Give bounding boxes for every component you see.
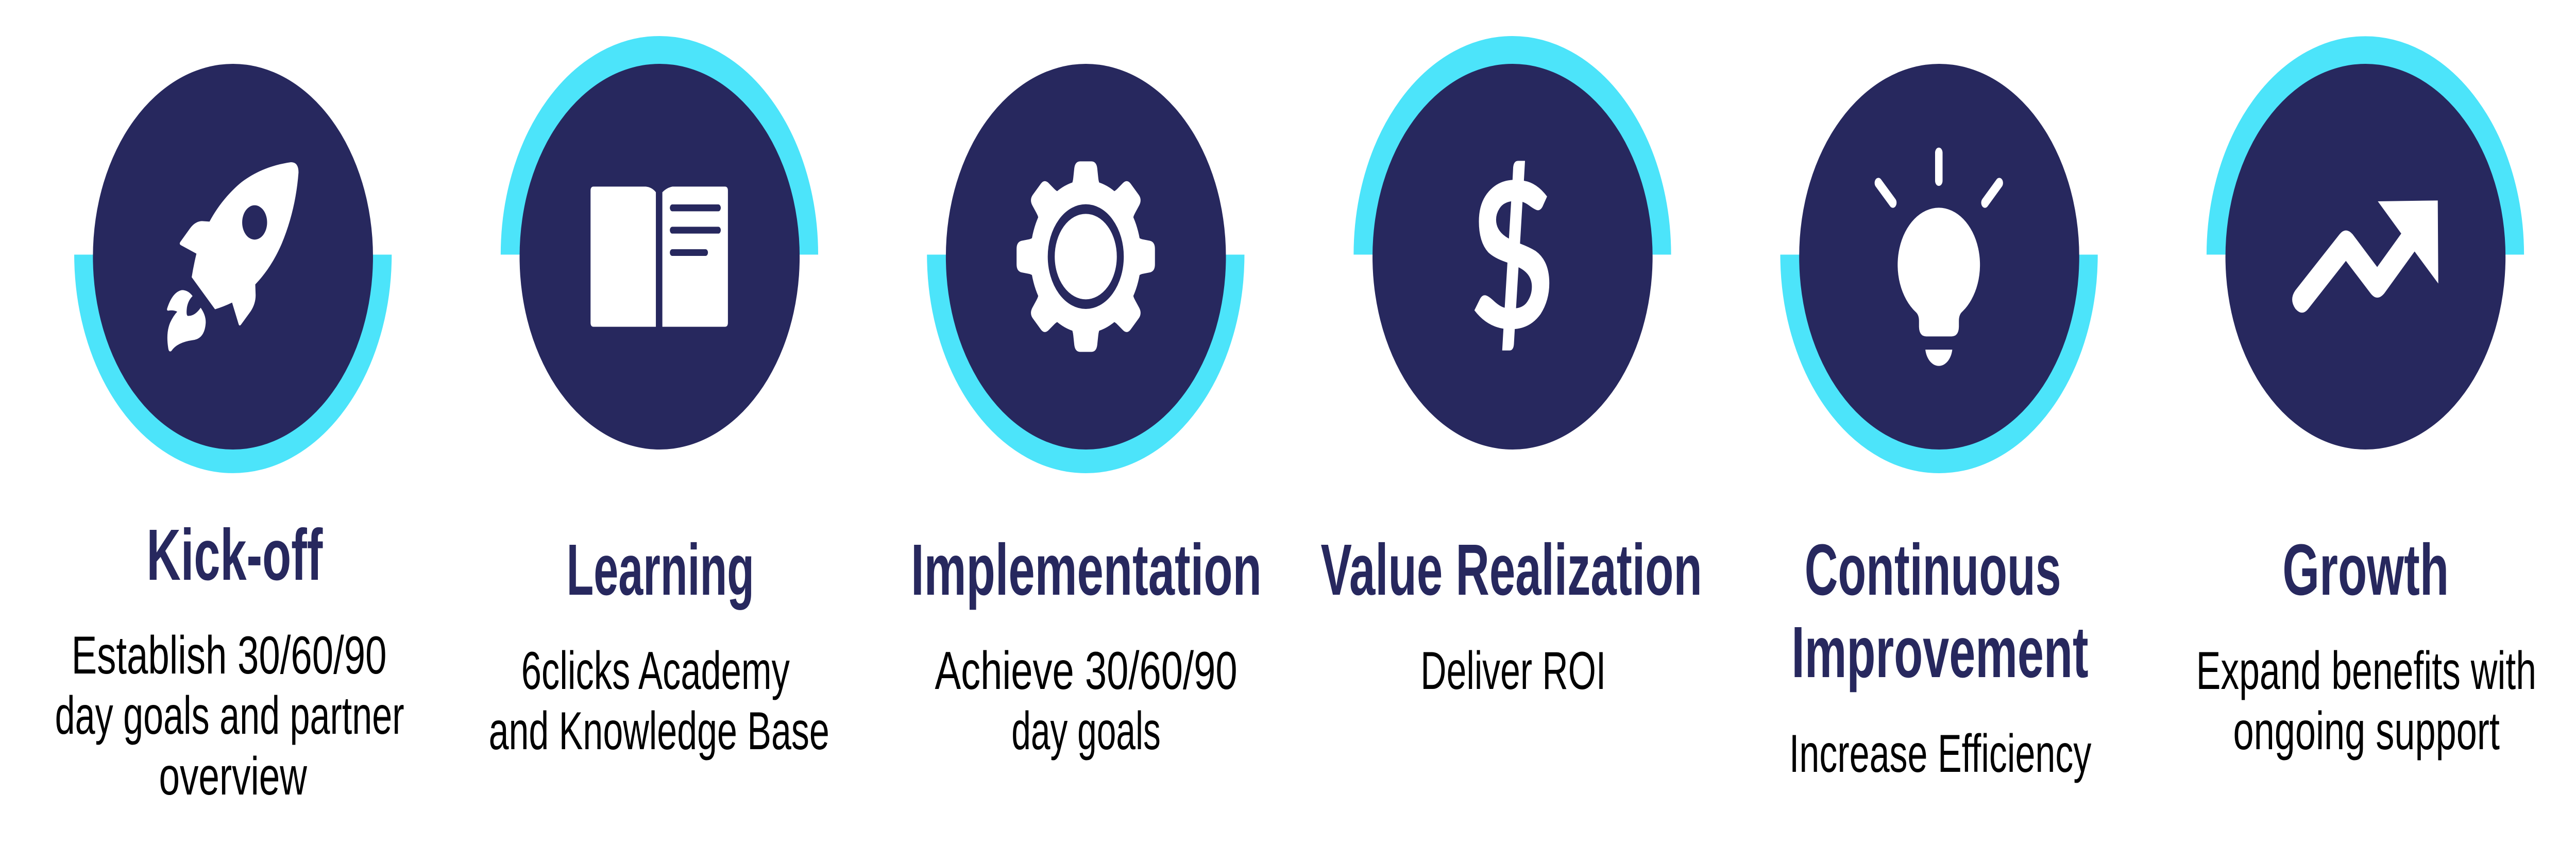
icon: growth arrow	[2292, 200, 2438, 313]
panel: Learning step	[489, 51, 829, 761]
heading: Continuous Improvement: Continuous	[1805, 529, 2061, 611]
text: Implementation description: day goals	[1011, 701, 1161, 761]
ring: upper half cyan arc	[512, 51, 807, 255]
text: Kick-off description	[55, 626, 404, 806]
text: Growth description: ongoing support	[2233, 701, 2500, 761]
text: Kick-off description: Establish 30/60/90	[72, 626, 386, 685]
ring: upper half cyan arc	[1365, 51, 1660, 255]
circle: navy disc	[93, 64, 373, 450]
heading: Learning: Learning	[567, 529, 754, 611]
heading: Value Realization: Value Realization	[1321, 529, 1702, 611]
heading: Kick-off: Kick-off	[147, 514, 323, 596]
circle: navy disc	[1799, 64, 2079, 450]
panel: Implementation step	[911, 64, 1262, 761]
text: Implementation description: Achieve 30/60/90	[935, 641, 1238, 701]
text: Learning description: and Knowledge Base	[489, 701, 829, 761]
ring: lower half cyan arc	[86, 254, 380, 458]
heading: Continuous Improvement: Improvement	[1791, 612, 2089, 693]
icon: light bulb	[1878, 153, 1999, 366]
icon: dollar sign	[1475, 161, 1549, 351]
text: Kick-off description: overview	[159, 747, 307, 806]
icon: gear	[1016, 161, 1155, 352]
panel: Continuous Improvement step	[1789, 64, 2092, 784]
panel: Growth step	[2196, 51, 2536, 761]
text: Learning description	[489, 641, 829, 761]
ring: upper half cyan arc	[2218, 51, 2513, 255]
ring: lower half cyan arc	[938, 254, 1233, 458]
panel: Value Realization step	[1321, 51, 1702, 701]
text: Kick-off description: day goals and partner	[55, 686, 404, 746]
icon: open book	[590, 186, 728, 327]
panel: Kick-off step	[55, 64, 404, 806]
circle: navy disc	[519, 64, 800, 450]
heading: Implementation: Implementation	[911, 529, 1262, 611]
circle: navy disc	[1372, 64, 1653, 450]
heading: Growth: Growth	[2282, 529, 2449, 611]
circle: navy disc	[2226, 64, 2505, 450]
text: Implementation description	[935, 641, 1238, 761]
circle: navy disc	[946, 64, 1226, 450]
ring: lower half cyan arc	[1791, 254, 2087, 458]
text: Value Realization description: Deliver ROI	[1420, 641, 1606, 701]
text: Learning description: 6clicks Academy	[521, 641, 790, 701]
text: Growth description	[2196, 641, 2536, 761]
icon: rocket	[167, 162, 298, 352]
text: Growth description: Expand benefits with	[2196, 641, 2536, 701]
text: Continuous Improvement description: Increase Efficiency	[1789, 724, 2092, 784]
heading: Continuous Improvement	[1791, 529, 2089, 693]
